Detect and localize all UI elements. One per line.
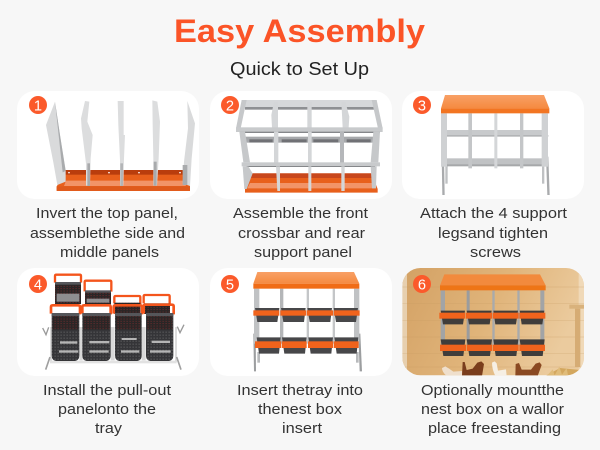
step 1 illustration: inverted top panel with side panels [46, 100, 195, 191]
step 6 caption: Optionally mountthe [421, 382, 564, 399]
panel: step 5 [210, 268, 392, 437]
step 5 caption: thenest box [258, 401, 343, 418]
step 4 caption [43, 382, 172, 437]
panel: step 6 [402, 268, 584, 437]
panel: step 1 [17, 91, 199, 261]
step 1 badge [29, 96, 47, 114]
step 1 caption: middle panels [60, 244, 159, 261]
step 2 card [210, 91, 392, 199]
step 4 badge: 4 [34, 277, 42, 293]
step 3 card [402, 91, 584, 199]
step 3 caption: legsand tighten [438, 225, 548, 242]
step 2 caption: Assemble the front [233, 205, 369, 222]
step 5 caption: insert [282, 420, 323, 437]
step 3 caption: Attach the 4 support [420, 205, 568, 222]
panel: step 3 [402, 91, 584, 261]
step 4 caption: tray [95, 420, 123, 437]
step 4 card [17, 268, 199, 376]
hens [442, 361, 568, 376]
step 6 photo: nest box mounted on coop wall with hens [402, 268, 584, 376]
step 5 badge [221, 275, 239, 293]
step 2 badge [221, 96, 239, 114]
step 1 badge: 1 [34, 98, 42, 114]
step 3 caption [420, 205, 568, 261]
step 4 caption: Install the pull-out [43, 382, 172, 399]
step 5 illustration: nest box with trays [253, 272, 362, 371]
step 6 caption: place freestanding [428, 420, 561, 437]
subtitle: Quick to Set Up [230, 59, 369, 79]
step 3 badge: 3 [418, 98, 426, 114]
step 1 caption [30, 205, 185, 261]
step 1 card [17, 91, 199, 199]
step 1 caption: Invert the top panel, [36, 205, 178, 222]
panel: step 2 [210, 91, 392, 261]
step 4 badge [29, 275, 47, 293]
panel: step 4 [17, 268, 199, 437]
step 5 caption: Insert thetray into [237, 382, 363, 399]
step 5 caption [237, 382, 363, 437]
step 2 caption [233, 205, 369, 261]
step 6 caption [421, 382, 564, 437]
step 3 badge [413, 96, 431, 114]
step 2 illustration: frame with crossbars [236, 100, 383, 193]
step 2 caption: crossbar and rear [238, 225, 365, 242]
step 2 badge: 2 [226, 98, 234, 114]
step 4 illustration: pull-out panels on tray [43, 275, 184, 370]
step 3 caption: screws [470, 244, 521, 261]
step 6 badge: 6 [418, 277, 426, 293]
step 4 caption: panelonto the [58, 401, 156, 418]
step 3 illustration: frame with orange top and legs [441, 95, 550, 195]
title: Easy Assembly [174, 13, 425, 49]
step 6 badge [413, 275, 431, 293]
step 2 caption: support panel [254, 244, 352, 261]
step 5 badge: 5 [226, 277, 234, 293]
step 1 caption: assemblethe side and [30, 225, 185, 242]
step 5 card [210, 268, 392, 376]
step 6 caption: nest box on a wallor [421, 401, 564, 418]
